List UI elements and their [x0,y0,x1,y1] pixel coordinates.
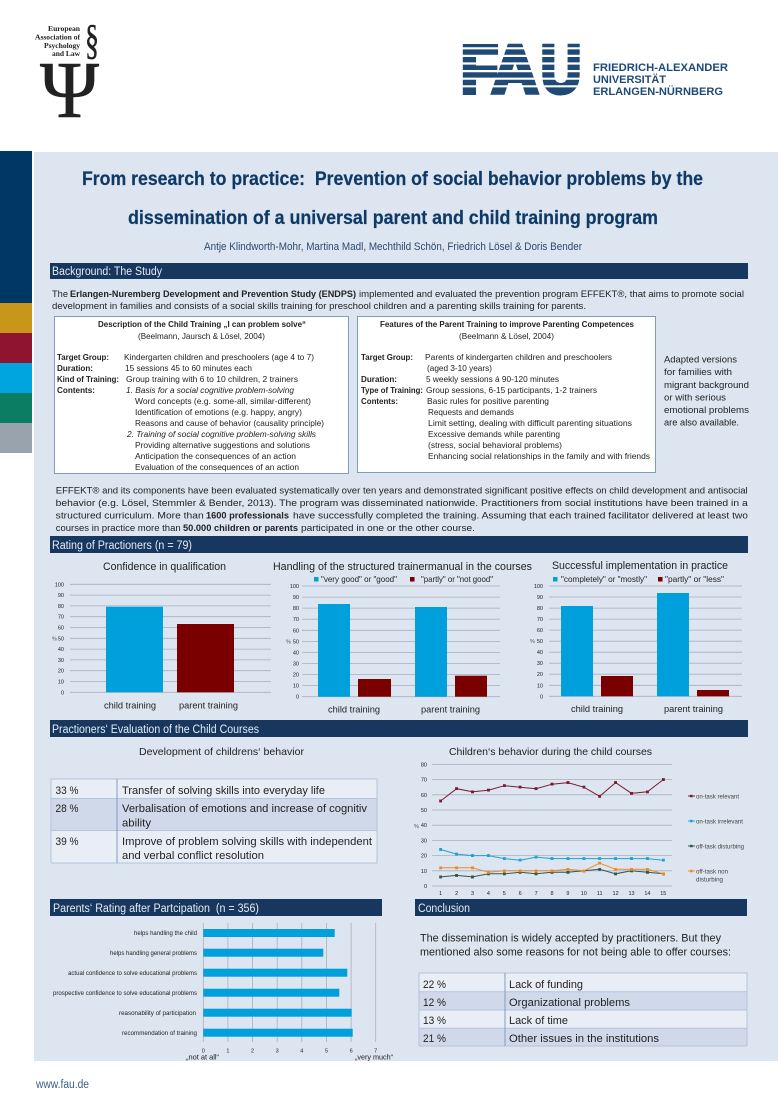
line chart: behavior during courses: Children‘s behavior during the child courses [449,747,652,758]
bar chart: successful implementation: 90 [537,595,543,601]
logo: European Association of Psychology and Law: and Law [52,50,81,58]
bar chart: handling of the trainer manual: 40 [293,650,299,656]
line chart: behavior during courses: 12 [613,891,619,897]
panel: parent training features: Limit setting, dealing with difficult parenting situations [428,418,632,428]
table: development of behavior: Improve of problem solving skills with independent [122,836,373,848]
effect text: 50.000 children or parents [183,523,298,534]
bar chart: parents rating: reasonability of participation [119,1010,196,1017]
line chart: behavior during courses: on-task irrelevant [696,818,743,825]
bar chart: handling of the trainer manual: 80 [293,606,299,612]
line chart: behavior during courses: 7 [535,891,538,897]
panel: parent training features: (Beelmann & Lösel, 2004) [459,331,554,341]
effect text: structured curriculum. More than [56,510,204,522]
side note: adapted versions: migrant background [664,380,749,391]
bar chart: handling of the trainer manual: "partly" or "not good" [421,575,493,584]
panel: parent training features [358,316,656,472]
panel: child training description: Description of the Child Training „I can problem solve“ [98,319,306,329]
chart title: development of behavior: Development of childrens‘ behavior [139,747,305,758]
logo: European Association of Psychology and Law: European [48,25,80,33]
table: development of behavior: and verbal conflict resolution [122,850,264,862]
table: development of behavior: 33 % [56,785,78,797]
bar chart: handling of the trainer manual [273,561,532,714]
bar chart: successful implementation: 40 [537,650,543,656]
poster background panel [34,152,778,1061]
bar chart: handling of the trainer manual: "very good" or "good" [321,575,397,584]
logo: European Association of Psychology and Law [35,18,99,135]
authors: Antje Klindworth-Mohr, Martina Madl, Mechthild Schön, Friedrich Lösel & Doris Bender [204,241,582,253]
bar chart: parents rating: 2 [251,1049,254,1055]
panel: child training description: Target Group: [57,352,109,362]
bar chart: handling of the trainer manual: 20 [293,673,299,679]
bar chart: parents rating: 4 [300,1049,303,1055]
bar chart: handling of the trainer manual: 70 [293,617,299,623]
panel: child training description: Identification of emotions (e.g. happy, angry) [135,407,302,417]
line chart: behavior during courses: 60 [421,793,427,799]
effect text: participated in one or the other course. [301,523,475,534]
line chart: behavior during courses: 70 [421,778,427,784]
logo: FAU: A [492,32,538,108]
bar chart: confidence in qualification [52,561,271,710]
panel: parent training features: 5 weekly sessions á 90-120 minutes [426,374,559,384]
bar chart: parents rating [53,923,394,1062]
line chart: behavior during courses: 4 [487,891,490,897]
bar chart: handling of the trainer manual: 0 [296,695,299,701]
table: development of behavior: 39 % [56,836,78,848]
line chart: behavior during courses: 14 [644,891,650,897]
logo: FAU: FRIEDRICH-ALEXANDER [593,62,728,74]
side note: adapted versions [664,354,749,428]
panel: parent training features: Type of Training: [361,385,423,395]
bar chart: handling of the trainer manual: 50 [293,639,299,645]
bar chart: successful implementation: Successful implementation in practice [552,560,728,572]
bar chart: successful implementation: 30 [537,661,543,667]
bar chart: confidence in qualification: Confidence in qualification [103,561,226,573]
bar chart: confidence in qualification: 90 [58,593,64,599]
panel: parent training features: Target Group: [361,352,413,362]
table: reasons: Other issues in the institutions [509,1033,659,1045]
panel: child training description: 2. Training of social cognitive problem-solving skills [126,429,317,439]
colour sidebar [0,151,32,453]
bar chart: parents rating: helps handling general problems [110,950,198,957]
panel: child training description: Group training with 6 to 10 children, 2 trainers [126,374,298,384]
panel: parent training features: (stress, social behavioral problems) [428,440,562,450]
bar chart: successful implementation: 20 [537,672,543,678]
bar chart: successful implementation: 10 [537,683,543,689]
bar chart: successful implementation: "completely" or "mostly" [561,575,647,584]
bar chart: parents rating: 5 [325,1049,328,1055]
background text: The [52,289,68,300]
panel: child training description: Contents: [57,385,95,395]
panel: parent training features: Parents of kindergarten children and preschoolers [425,352,612,362]
section heading: background: Background: The Study [52,266,162,278]
table: development of behavior [51,779,377,863]
background text [52,289,744,312]
line chart: behavior during courses: 30 [421,838,427,844]
panel: parent training features: Group sessions, 6-15 participants, 1-2 trainers [426,385,597,395]
bar chart: parents rating: helps handling the child [134,930,197,937]
panel: parent training features: Duration: [361,374,397,384]
bar chart: successful implementation: 80 [537,606,543,612]
section heading: parents rating: Parents‘ Rating after Partcipation (n = 356) [53,903,259,915]
table: reasons: Lack of time [509,1015,568,1027]
panel: parent training features: Excessive demands while parenting [428,429,560,439]
background text: implemented and evaluated the prevention program EFFEKT®, that aims to promote social [359,289,744,300]
bar chart: successful implementation: parent training [664,703,723,714]
conclusion text: mentioned also some reasons for not being able to offer courses: [420,946,731,958]
table: reasons: 13 % [423,1015,446,1027]
bar chart: confidence in qualification: parent training [179,700,238,710]
panel: child training description: Reasons and cause of behavior (causality principle) [135,418,324,428]
background text: Erlangen-Nuremberg Development and Prevention Study (ENDPS) [70,289,356,300]
bar chart: successful implementation: child training [571,703,623,714]
background text: development in families and consists of a social skills training for preschool children and a parenting skills training for parents. [52,301,586,312]
line chart: behavior during courses: 11 [597,891,603,897]
bar chart: successful implementation: 50 [537,639,543,645]
table: development of behavior: 28 % [56,803,78,815]
bar chart: successful implementation: 100 [534,584,543,590]
panel: child training description: Providing alternative suggestions and solutions [135,440,310,450]
logo: European Association of Psychology and Law: Psychology [44,42,80,50]
panel: child training description [54,316,348,474]
bar chart: successful implementation: "partly" or "less" [665,575,724,584]
panel: parent training features: Contents: [361,396,398,406]
section heading: parents rating [50,899,382,916]
line chart: behavior during courses: 40 [421,823,427,829]
line chart: behavior during courses: 13 [628,891,635,897]
bar chart: confidence in qualification: % [52,636,57,642]
panel: parent training features: Enhancing social relationships in the family and with friends [428,451,650,461]
logo: FAU: U [541,32,581,108]
bar chart: parents rating: „not at all“ [186,1052,220,1062]
title: dissemination of a universal parent and child training program [128,208,658,229]
bar chart: successful implementation: 0 [540,694,543,700]
logo: European Association of Psychology and Law: Ψ [40,47,99,135]
logo: FAU: UNIVERSITÄT [593,73,666,86]
section heading: background [50,263,748,279]
effect text: EFFEKT® and its components have been evaluated systematically over ten years and demonstrated significant positive effects on child development and antisocial [56,486,748,496]
panel: child training description: 15 sessions 45 to 60 minutes each [125,363,252,373]
panel: child training description: Anticipation the consequences of an action [135,451,296,461]
bar chart: confidence in qualification: 20 [58,669,64,675]
line chart: behavior during courses: on-task relevant [696,793,739,800]
bar chart: parents rating: „very much“ [355,1052,394,1062]
panel: parent training features: Basic rules for positive parenting [427,396,549,406]
section heading: rating: Rating of Practioners (n = 79) [52,540,192,552]
bar chart: confidence in qualification: 50 [58,636,64,642]
section heading: rating [50,536,748,553]
bar chart: confidence in qualification: child training [104,700,156,710]
line chart: behavior during courses [414,747,744,897]
bar chart: successful implementation: % [530,639,535,645]
line chart: behavior during courses: off-task non [696,868,728,875]
side note: adapted versions: for families with [664,367,732,378]
bar chart: parents rating: 3 [276,1049,279,1055]
table: development of behavior: Verbalisation of emotions and increase of cognitiv [122,803,367,815]
panel: child training description: Word concepts (e.g. some-all, similar-different) [135,396,311,406]
bar chart: confidence in qualification: 30 [58,658,64,664]
effect text: courses in practice more than [56,523,181,534]
effect text: have successfully completed the training. Assuming that each trained facilitator delivered at least two [293,510,748,522]
table: reasons: Organizational problems [509,997,630,1009]
line chart: behavior during courses: 80 [421,762,427,768]
line chart: behavior during courses: 50 [421,808,427,814]
table: reasons: 22 % [423,979,446,991]
bar chart: handling of the trainer manual: child training [328,704,380,714]
panel: parent training features: Requests and demands [428,407,514,417]
title: From research to practice: Prevention of social behavior problems by the [82,169,703,190]
line chart: behavior during courses: 0 [424,884,427,890]
bar chart: handling of the trainer manual: 90 [293,595,299,601]
bar chart: successful implementation: 70 [537,617,543,623]
bar chart: confidence in qualification: 10 [58,680,64,686]
line chart: behavior during courses: off-task disturbing [696,843,744,850]
line chart: behavior during courses: 1 [439,891,442,897]
side note: adapted versions: or with serious [664,392,726,404]
panel: parent training features: Features of the Parent Training to improve Parenting Competences [380,319,634,329]
line chart: behavior during courses: 15 [660,891,666,897]
line chart: behavior during courses: 2 [455,891,458,897]
panel: parent training features: (aged 3-10 years) [427,363,492,373]
line chart: behavior during courses: 9 [566,891,569,897]
side note: adapted versions: are also available. [664,418,739,428]
logo: FAU: ERLANGEN-NÜRNBERG [593,85,723,98]
bar chart: confidence in qualification: 100 [55,582,64,588]
line chart: behavior during courses: % [414,824,419,830]
bar chart: parents rating: recommendation of training [122,1030,197,1037]
panel: child training description: (Beelmann, Jaursch & Lösel, 2004) [138,331,265,341]
section heading: evaluation of child courses: Practioners‘ Evaluation of the Child Courses [52,724,259,736]
panel: child training description: Kindergarten children and preschoolers (age 4 to 7) [124,352,314,362]
bar chart: parents rating: 7 [374,1049,377,1055]
line chart: behavior during courses: 20 [421,854,427,860]
bar chart: handling of the trainer manual: parent training [421,704,480,714]
logo: FAU [455,32,728,108]
table: reasons: 21 % [423,1033,446,1045]
bar chart: confidence in qualification: 40 [58,647,64,653]
effect text [56,486,748,534]
section heading: conclusion: Conclusion [418,903,470,915]
section heading: conclusion [415,899,747,916]
line chart: behavior during courses: 3 [471,891,474,897]
logo: FAU: F [461,32,498,108]
panel: child training description: Duration: [57,363,93,373]
bar chart: handling of the trainer manual: 30 [293,662,299,668]
bar chart: handling of the trainer manual: 60 [293,628,299,634]
bar chart: confidence in qualification: 80 [58,604,64,610]
bar chart: parents rating: actual confidence to solve educational problems [68,970,198,977]
bar chart: confidence in qualification: 0 [61,690,64,696]
table: development of behavior: ability [122,818,151,830]
logo: European Association of Psychology and Law: Association of [35,34,81,42]
panel: child training description: Kind of Training: [57,374,119,384]
bar chart: handling of the trainer manual: 10 [293,684,299,690]
table: reasons [419,973,747,1046]
side note: adapted versions: Adapted versions [664,354,737,366]
bar chart: parents rating: 1 [226,1049,229,1055]
section heading: evaluation of child courses [50,720,748,737]
line chart: behavior during courses: 6 [519,891,522,897]
bar chart: parents rating: prospective confidence to solve educational problems [53,990,198,997]
side note: adapted versions: emotional problems [664,405,749,416]
line chart: behavior during courses: 5 [503,891,506,897]
conclusion text [420,932,731,958]
logo: European Association of Psychology and Law: § [85,18,99,64]
bar chart: confidence in qualification: 60 [58,626,64,632]
table: development of behavior: Transfer of solving skills into everyday life [122,785,325,797]
bar chart: handling of the trainer manual: 100 [290,584,299,590]
bar chart: confidence in qualification: 70 [58,615,64,621]
title [82,169,703,229]
table: reasons: Lack of funding [509,979,583,991]
bar chart: successful implementation [530,560,742,714]
footer url: www.fau.de [35,1079,89,1091]
panel: child training description: Evaluation of the consequences of an action [135,462,299,472]
bar chart: handling of the trainer manual: % [286,639,291,645]
bar chart: handling of the trainer manual: Handling of the structured trainermanual in the courses [273,561,532,573]
effect text: 1600 professionals [206,510,289,522]
effect text: behavior (e.g. Lösel, Stemmler & Bender, 2013). The program was disseminated nationwide. Practitioners from social institutions have been trained in a [56,498,748,509]
line chart: behavior during courses: 8 [550,891,554,897]
line chart: behavior during courses: disturbing [696,876,723,883]
bar chart: parents rating: 0 [202,1049,205,1055]
conclusion text: The dissemination is widely accepted by practitioners. But they [420,932,721,944]
panel: child training description: 1. Basis for a social cognitive problem-solving [126,385,294,395]
bar chart: parents rating: 6 [350,1049,353,1055]
line chart: behavior during courses: 10 [581,891,587,897]
bar chart: successful implementation: 60 [537,628,543,634]
line chart: behavior during courses: 10 [421,869,427,875]
table: reasons: 12 % [423,997,446,1009]
